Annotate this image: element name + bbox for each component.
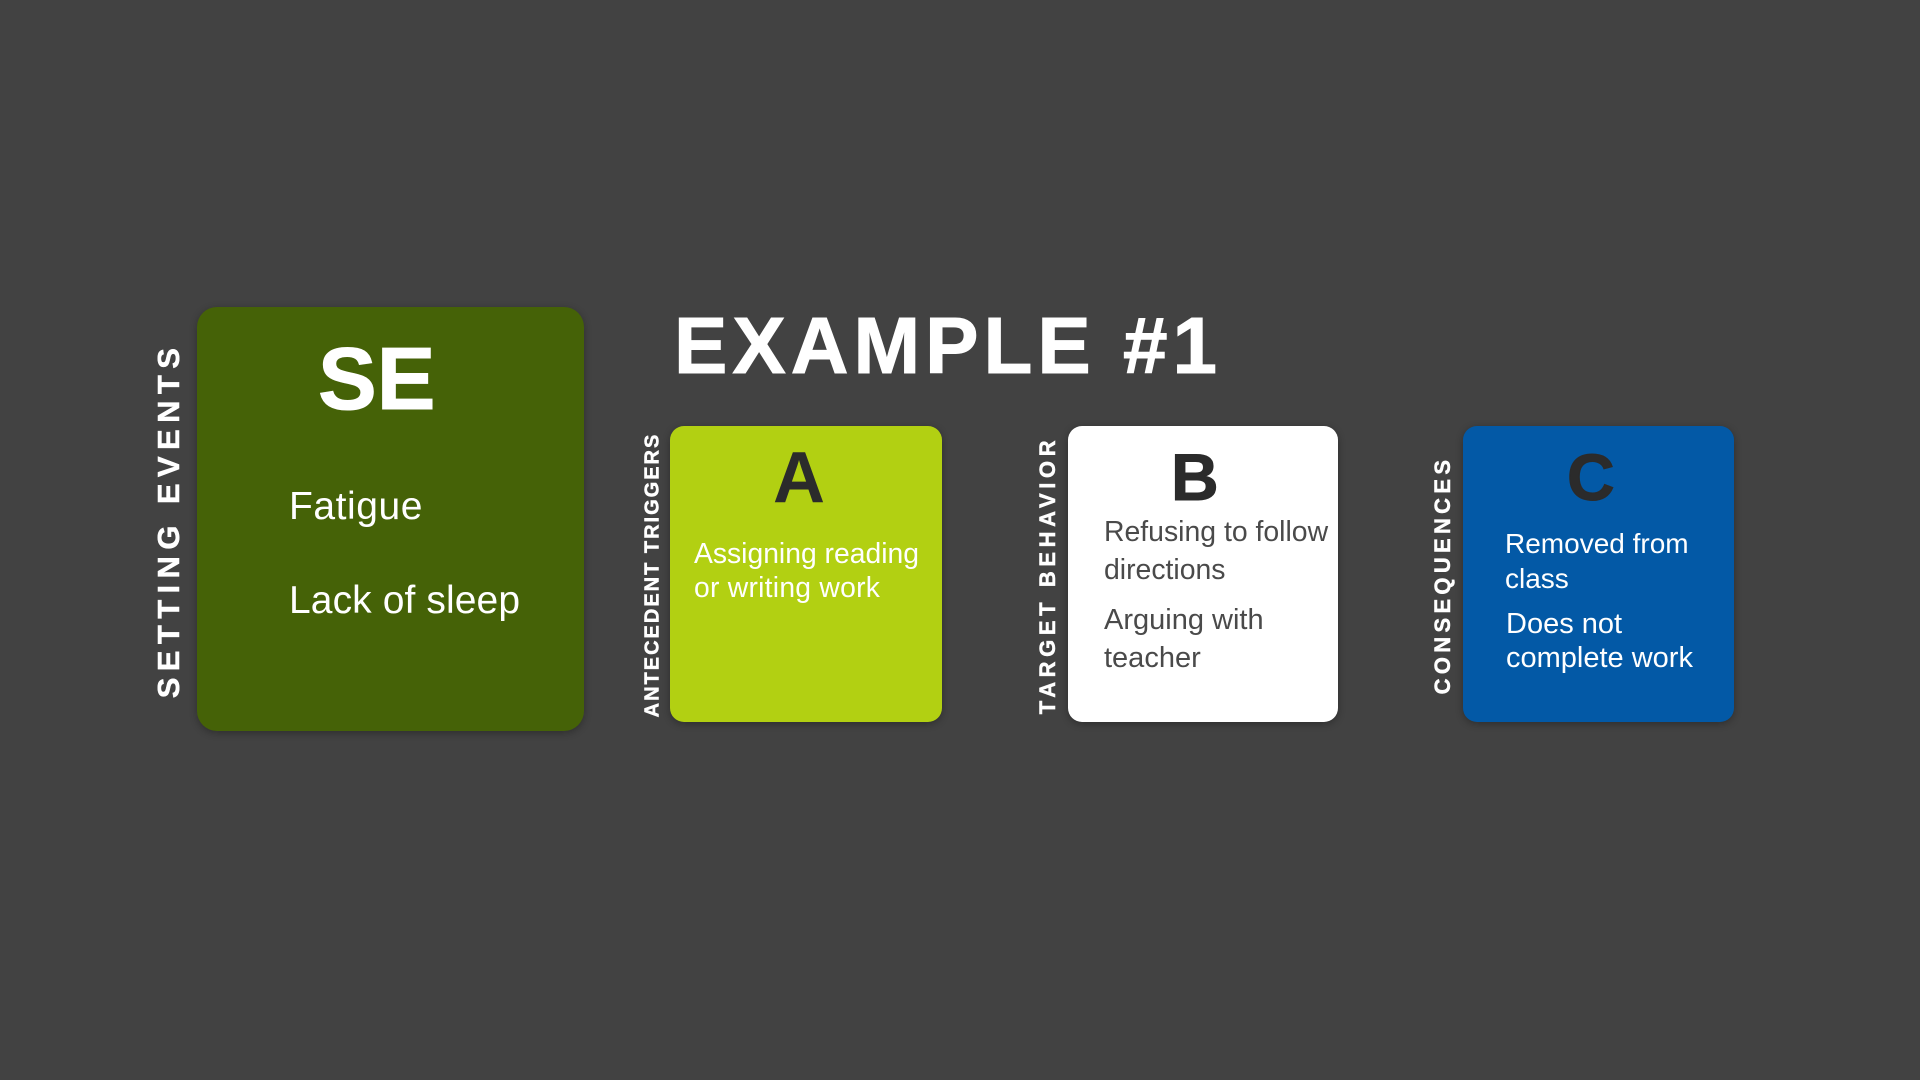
text: antecedent example	[694, 537, 919, 603]
text: not complete: complete work	[1506, 642, 1693, 674]
label: target behavior: TARGET BEHAVIOR	[1035, 436, 1060, 714]
C letter heading: C	[1567, 440, 1615, 514]
text: removed: class	[1505, 563, 1569, 594]
text: refusing	[1104, 516, 1328, 586]
panel: behavior	[1068, 426, 1338, 722]
panel: consequences	[1463, 426, 1734, 722]
title: EXAMPLE #1	[674, 301, 1222, 390]
text: arguing	[1104, 604, 1264, 674]
text: lack of sleep: Lack of sleep	[289, 579, 520, 622]
text: antecedent example: or writing work	[694, 571, 880, 603]
text: removed: Removed from	[1505, 528, 1689, 559]
label: antecedent triggers: ANTECEDENT TRIGGERS	[642, 433, 664, 717]
SE letter heading: SE	[318, 329, 435, 428]
text: refusing: directions	[1104, 554, 1226, 586]
A letter heading: A	[773, 438, 825, 518]
text: not complete	[1506, 608, 1693, 674]
panel: setting events	[197, 307, 584, 731]
text: removed	[1505, 528, 1689, 594]
panel: antecedent	[670, 426, 942, 722]
text: fatigue: Fatigue	[289, 485, 423, 528]
B letter heading: B	[1171, 440, 1219, 514]
text: antecedent example: Assigning reading	[694, 537, 919, 569]
text: refusing: Refusing to follow	[1104, 516, 1328, 548]
label: setting events: SETTING EVENTS	[151, 342, 186, 698]
text: arguing: teacher	[1104, 642, 1201, 674]
text: arguing: Arguing with	[1104, 604, 1264, 636]
label: consequences: CONSEQUENCES	[1430, 456, 1455, 694]
text: not complete: Does not	[1506, 608, 1622, 640]
